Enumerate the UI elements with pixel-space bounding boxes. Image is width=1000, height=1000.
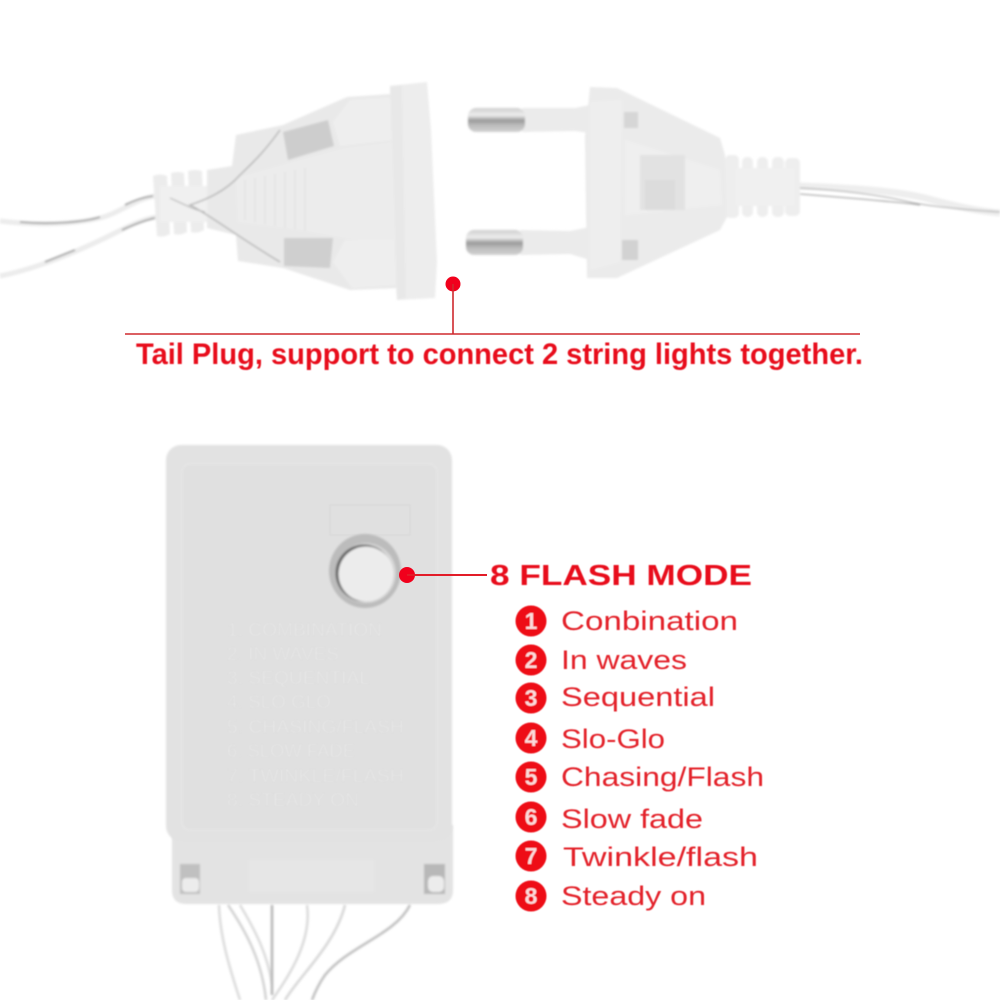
bottom pin	[520, 227, 590, 260]
mode 7: Twinkle/flash	[563, 842, 758, 872]
mode 2: 2	[525, 647, 537, 673]
mode 6: 6	[525, 804, 537, 830]
callout dot	[446, 276, 460, 292]
plug inner core	[640, 155, 685, 210]
socket tail plug	[0, 82, 437, 300]
controller wires	[219, 905, 410, 1000]
controller cover	[166, 445, 452, 841]
mode button	[329, 534, 401, 608]
mode 7	[516, 840, 758, 872]
socket strain-relief ribs	[153, 170, 208, 237]
mode 2	[516, 644, 687, 676]
mode 5	[516, 762, 764, 792]
right notch	[424, 864, 445, 894]
mode 4	[516, 722, 665, 754]
mode 1	[516, 606, 738, 636]
socket body	[207, 94, 398, 290]
mode 6	[516, 802, 703, 834]
mode 2: In waves	[561, 645, 687, 675]
plug wires	[800, 186, 1000, 213]
embossed mode list: 1. COMBINATION	[227, 620, 382, 640]
mode 8: Steady on	[561, 881, 706, 911]
mode 5: 5	[525, 764, 538, 790]
socket wires	[0, 196, 156, 276]
mode 4: 4	[525, 725, 538, 751]
embossed brand mark	[330, 505, 410, 535]
flash mode dot	[399, 567, 415, 583]
mode 6: Slow fade	[561, 804, 703, 834]
embossed mode list: 3. SEQUENTIAL	[227, 668, 370, 688]
mode 3: Sequential	[561, 682, 715, 712]
socket flange	[390, 82, 437, 300]
flash mode list	[516, 606, 764, 912]
embossed mode list: 6. SLOW FADE	[227, 741, 355, 761]
plug ribs	[725, 155, 800, 218]
flash mode heading: 8 FLASH MODE	[490, 560, 752, 592]
mode 8: 8	[525, 883, 538, 909]
embossed mode list: 5. CHASING/FLASH	[227, 717, 404, 737]
flash mode callout	[399, 560, 752, 592]
plug contacts	[624, 112, 638, 128]
plug body	[585, 87, 727, 278]
socket ribbed core	[245, 168, 305, 231]
callout text: Tail Plug, support to connect 2 string lights together.	[136, 338, 863, 371]
mode 1: 1	[525, 608, 538, 634]
embossed mode list: 4. SLO GLO	[227, 692, 331, 712]
mode 1: Conbination	[561, 606, 738, 636]
tail plug callout	[125, 276, 863, 371]
socket metal contacts	[283, 120, 334, 160]
mode 7: 7	[525, 843, 537, 869]
callout leader	[125, 284, 860, 334]
left notch	[180, 864, 200, 894]
mode 3	[516, 682, 715, 714]
controller lower block	[172, 825, 453, 1000]
mode 5: Chasing/Flash	[561, 762, 764, 792]
plug with pins	[466, 87, 1000, 278]
embossed mode list	[227, 620, 404, 810]
mode 3: 3	[525, 685, 537, 711]
mode 4: Slo-Glo	[561, 724, 665, 754]
embossed mode list: 8. STEADY ON	[227, 790, 359, 810]
controller box	[166, 445, 453, 1000]
flash mode leader	[407, 574, 487, 576]
socket internal wires	[190, 130, 280, 262]
mode 8	[516, 880, 706, 912]
top pin	[522, 105, 590, 133]
embossed mode list: 7. TWINKLE/FLASH	[227, 766, 404, 786]
embossed mode list: 2. IN WAVES	[227, 644, 339, 664]
